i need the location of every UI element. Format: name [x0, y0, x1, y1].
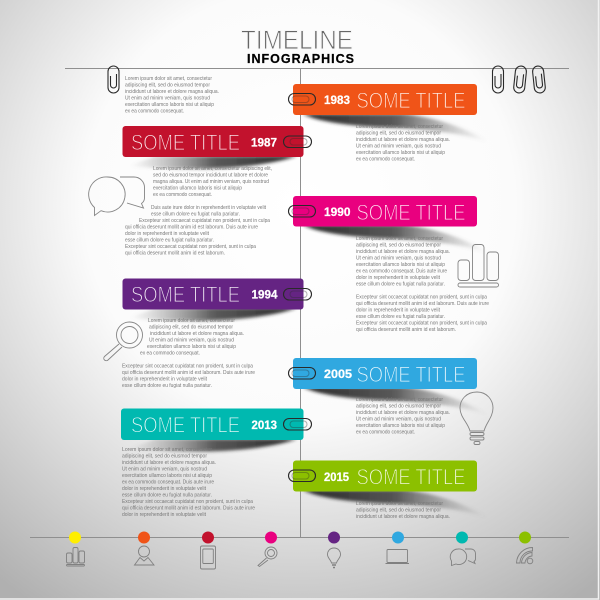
icon: bar chart large — [458, 244, 498, 287]
title bar: 1994: 1994 — [252, 290, 278, 302]
title bar: 1987: SOME TITLE — [131, 130, 240, 155]
title bar: 2005: SOME TITLE — [356, 362, 466, 387]
text block: 1987: Excepteur sint occaecat cupidatat non proident, sunt in culpa — [139, 218, 270, 224]
text block: 1990: Lorem ipsum dolor sit amet, consectetur — [356, 236, 443, 242]
title bar: 2013 — [121, 408, 312, 440]
text block: 2015: adipiscing elit, sed do eiusmod tempor — [356, 507, 441, 513]
title bar: 1994: SOME TITLE — [131, 282, 240, 307]
icon: small bars — [66, 548, 84, 566]
text block: 1987: esse cillum dolore eu fugiat nulla pariatur. — [151, 211, 240, 217]
text block: 1994: exercitation ullamco laboris nisi ut aliquip — [147, 344, 236, 350]
text block: 1983: ex ea commodo consequat. — [356, 156, 415, 162]
text block: 2013: Ut enim ad minim veniam, quis nostrud — [122, 466, 207, 472]
text block: 2005 — [356, 397, 450, 435]
text block: 2013: dolor in reprehenderit in voluptate velit — [122, 486, 206, 492]
text block: 1990: ex ea commodo consequat. Duis aute irure — [356, 268, 447, 274]
text block: 2013: Excepteur sint occaecat cupidatat non proident, sunt in culpa — [122, 499, 253, 505]
text block: 1987: dolor in reprehenderit in voluptate velit — [125, 231, 209, 237]
text block: 2005: adipiscing elit, sed do eiusmod tempor — [356, 403, 441, 409]
text block: 1994: incididunt ut labore et dolore magna aliqua. — [150, 331, 244, 337]
text block: 1987: Duis aute irure dolor in reprehenderit in voluptate velit — [151, 205, 266, 211]
title bar: 2013: SOME TITLE — [131, 412, 240, 438]
title bar: 1990: 1990 — [324, 207, 350, 219]
text block: 1990: incididunt ut labore et dolore magna aliqua. — [356, 249, 450, 255]
text block: 2015 — [356, 501, 450, 520]
text block: 1987: ex ea commodo consequat. — [153, 192, 212, 198]
text block: 2013: Lorem ipsum dolor sit amet, consectetur — [122, 447, 212, 453]
shadows under title bars — [130, 114, 488, 518]
text block: 1990: esse cillum dolore eu fugiat nulla pariatur. — [356, 314, 445, 320]
icon: small magnifier — [258, 547, 277, 566]
text block: 1994: Lorem ipsum dolor sit amet, consectetur — [148, 318, 235, 324]
icon: small tablet — [200, 546, 216, 569]
text block: top left: Ut enim ad minim veniam, quis nostrud — [125, 96, 210, 102]
text block: top left: adipiscing elit, sed do eiusmod tempor — [125, 82, 210, 88]
text block: 2013: ex ea commodo consequat. Duis aute irure — [122, 480, 214, 486]
text block: 1987: exercitation ullamco laboris nisi ut aliquip — [153, 186, 242, 192]
text block: 1994: ex ea commodo consequat. — [140, 350, 200, 356]
text block: 2015: Lorem ipsum dolor sit amet, consectetur — [356, 501, 443, 507]
text block: 1994 — [122, 318, 255, 389]
text block: 1990: qui officia deserunt mollit anim id est laborum. — [356, 327, 456, 333]
icon: magnifier large — [104, 322, 142, 361]
text block: 1983: Ut enim ad minim veniam, quis nostrud — [356, 144, 441, 150]
text block: 1987: qui officia deserunt mollit anim id est laborum. Duis aute irure — [125, 224, 258, 230]
text block: 1983: Lorem ipsum dolor sit amet, consectetur — [356, 124, 443, 130]
text block: 1990: qui officia deserunt mollit anim id est laborum. Duis aute irure — [356, 301, 489, 307]
icon: paperclip top left — [108, 66, 119, 93]
icon: small bulb — [328, 548, 340, 568]
text block: 1990: esse cillum dolore eu fugiat nulla pariatur. — [356, 282, 445, 288]
icon: small laptop — [386, 550, 409, 564]
text block: 1983: adipiscing elit, sed do eiusmod tempor — [356, 130, 441, 136]
text block: 1983: incididunt ut labore et dolore magna aliqua. — [356, 137, 450, 143]
icon: small speech bubbles — [450, 549, 476, 566]
title: INFOGRAPHICS — [247, 52, 354, 66]
title bar: 2005 — [288, 358, 477, 389]
text block: 2013: adipiscing elit, sed do eiusmod tempor — [122, 454, 207, 460]
text block: 2015: incididunt ut labore et dolore magna aliqua. — [356, 514, 450, 520]
text block: top left: ex ea commodo consequat. — [125, 108, 184, 114]
text block: 2005: incididunt ut labore et dolore magna aliqua. — [356, 410, 450, 416]
text block: 1990 — [356, 236, 489, 333]
title bar: 1983: 1983 — [324, 95, 350, 107]
text block: 1990: dolor in reprehenderit in voluptate velit — [356, 275, 440, 281]
title bar: 2015: SOME TITLE — [356, 464, 466, 489]
text block: 2013: exercitation ullamco laboris nisi ut aliquip — [122, 473, 212, 479]
title: TIMELINE — [241, 25, 353, 55]
text block: 1987: Excepteur sint occaecat cupidatat non proident, sunt in culpa — [125, 244, 256, 250]
title bar: 2013: 2013 — [252, 420, 277, 432]
text block: top left: exercitation ullamco laboris nisi ut aliquip — [125, 102, 214, 108]
title bar: 1983: SOME TITLE — [356, 88, 466, 113]
title bar: 1987: 1987 — [251, 138, 277, 150]
text block: 1987: esse cillum dolore eu fugiat nulla pariatur. — [125, 237, 214, 243]
title bar: 2005: 2005 — [324, 369, 353, 381]
text block: 2013: incididunt ut labore et dolore magna aliqua. — [122, 460, 216, 466]
text block: 1994: dolor in reprehenderit in voluptate velit — [122, 376, 207, 382]
timeline axes — [30, 68, 569, 538]
text block: top left — [125, 76, 219, 114]
text block: 1990: exercitation ullamco laboris nisi ut aliquip — [356, 262, 445, 268]
title — [241, 25, 354, 66]
title bar: 1994 — [122, 278, 312, 310]
title bar: 1990 — [288, 196, 477, 226]
text block: 1987: sed do eiusmod tempor incididunt ut labore et dolore — [153, 172, 268, 178]
text block: 1983: exercitation ullamco laboris nisi ut aliquip — [356, 150, 445, 156]
text block: 2005: Ut enim ad minim veniam, quis nostrud — [356, 416, 441, 422]
text block: 1994: adipiscing elit, sed do eiusmod tempor — [149, 324, 233, 330]
text block: 2013 — [122, 447, 255, 518]
timeline dots — [69, 532, 531, 544]
text block: 1990: Ut enim ad minim veniam, quis nostrud — [356, 256, 441, 262]
icons: paperclips top right — [492, 66, 546, 94]
text block: 1987: qui officia deserunt mollit anim id est laborum. — [125, 250, 225, 256]
title bar: 2015: 2015 — [324, 472, 350, 484]
text block: 2013: dolor in reprehenderit in voluptate velit — [122, 512, 206, 518]
icon: small wifi — [516, 548, 533, 564]
text block: 1994: Excepteur sint occaecat cupidatat non proident, sunt in culpa — [122, 364, 253, 370]
icon: light bulb large — [460, 392, 493, 444]
text block: 1990: dolor in reprehenderit in voluptate velit — [356, 307, 440, 313]
icon: speech bubbles large — [89, 177, 144, 216]
text block: 1994: qui officia deserunt mollit anim id est laborum. Duis aute irure — [122, 370, 255, 376]
text block: 1987: magna aliqua. Ut enim ad minim veniam, quis nostrud — [153, 179, 269, 185]
text block: top left: incididunt ut labore et dolore magna aliqua. — [125, 89, 219, 95]
text block: 1987: Lorem ipsum dolor sit amet, consectetur adipiscing elit, — [153, 166, 272, 172]
text block: 1990: Excepteur sint occaecat cupidatat non proident, sunt in culpa — [356, 294, 487, 300]
title bar: 2015 — [288, 460, 477, 492]
text block: 1983 — [356, 124, 450, 162]
icon: small person — [134, 546, 154, 565]
text block: 1994: esse cillum dolore eu fugiat nulla pariatur. — [122, 383, 212, 389]
text block: 1987 — [125, 166, 272, 256]
text block: 1994: Ut enim ad minim veniam, quis nostrud — [149, 337, 234, 343]
text block: top left: Lorem ipsum dolor sit amet, consectetur — [125, 76, 212, 82]
text block: 2013: esse cillum dolore eu fugiat nulla pariatur. — [122, 492, 212, 498]
text block: 1990: Excepteur sint occaecat cupidatat non proident, sunt in culpa — [356, 320, 487, 326]
title bar: 1990: SOME TITLE — [356, 200, 466, 225]
title bar: 1987 — [122, 126, 312, 157]
text block: 2005: ex ea commodo consequat. — [356, 429, 415, 435]
text block: 2005: Lorem ipsum dolor sit amet, consectetur — [356, 397, 443, 403]
text block: 2005: exercitation ullamco laboris nisi ut aliquip — [356, 423, 445, 429]
text block: 2013: qui officia deserunt mollit anim id est laborum. Duis aute irure — [122, 506, 255, 512]
title bar: 1983 — [288, 84, 477, 115]
text block: 1990: adipiscing elit, sed do eiusmod tempor — [356, 242, 441, 248]
